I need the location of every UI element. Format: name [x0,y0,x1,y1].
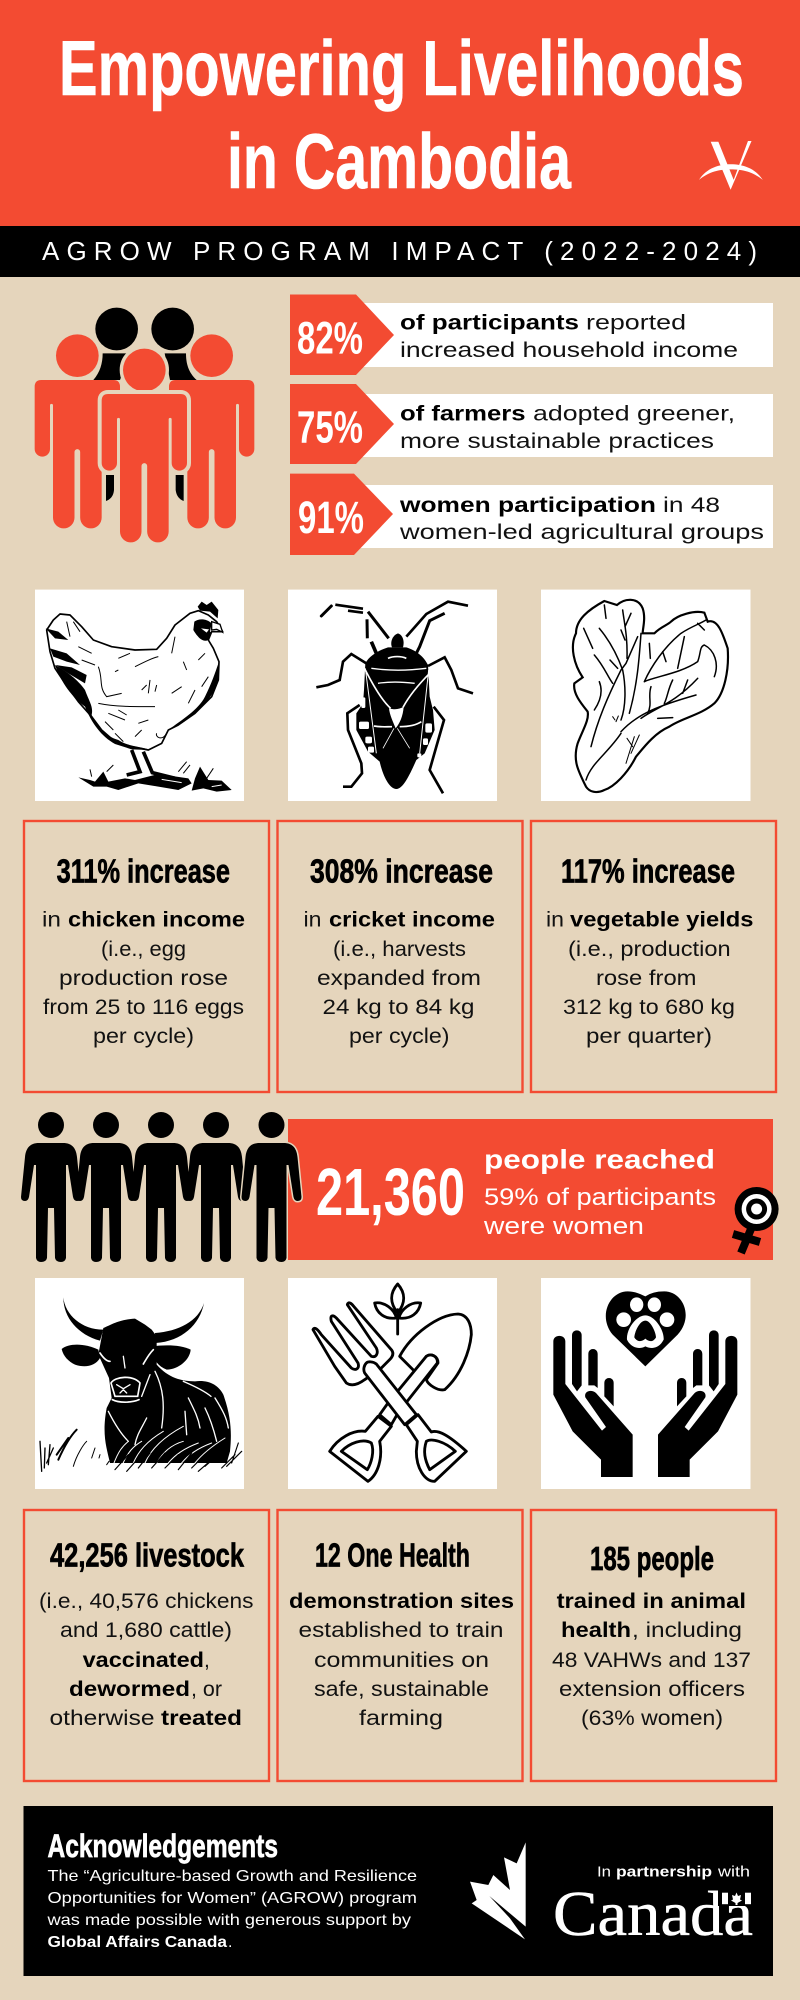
acknowledgement text [46,1868,417,1951]
icon: organisation logo [699,141,763,190]
Canada wordmark: Canada [553,1878,753,1949]
icon: hands holding paw heart [541,1278,750,1489]
stat: 82 percent [290,294,773,375]
icon: row of five people [21,1112,302,1262]
panel: One Health sites: farming [359,1707,443,1730]
heading: Acknowledgements [48,1828,278,1864]
icon: leafy vegetable [541,590,750,801]
panel: One Health sites: safe, sustainable [314,1678,489,1701]
panel: livestock: and 1,680 cattle) [60,1619,232,1642]
panel: chicken income: (i.e., egg [101,938,186,961]
panel: livestock: , [204,1649,210,1672]
stat: 82 percent: of participants [400,312,579,335]
panel: One Health sites: 12 One Health [315,1537,470,1574]
reach text: 59% of participants [484,1184,716,1211]
icon: maple leaf [470,1842,526,1939]
panel: livestock: , or [191,1678,222,1701]
acknowledgement text: Opportunities for Women” (AGROW) program [48,1890,417,1907]
acknowledgement text: Global Affairs Canada [48,1934,227,1951]
icon: group of people [35,308,254,542]
panel: vegetable yields: rose from [596,967,696,990]
panel: vegetable yields: vegetable yields [570,909,754,932]
panel: people trained: 48 VAHWs and 137 [552,1649,751,1672]
icon: female symbol [733,1187,779,1253]
reach text: people reached [484,1144,715,1174]
icon: insect [288,590,497,801]
panel: chicken income: from 25 to 116 eggs [43,996,244,1019]
stat: 75 percent: 75% [297,401,363,452]
panel: One Health sites: communities on [314,1649,489,1672]
panel: livestock: dewormed [69,1678,190,1701]
partnership text: partnership [616,1864,712,1881]
partnership text: In [597,1864,611,1881]
panel: people trained: trained in animal [557,1590,746,1613]
panel: people trained: extension officers [559,1678,745,1701]
stat: 91 percent: in 48 [663,494,720,517]
stat: 75 percent [290,384,773,464]
partnership text: with [717,1864,750,1881]
title: in Cambodia [227,117,571,205]
panel: livestock: treated [161,1707,242,1730]
stat: 91 percent [290,474,773,555]
panel: livestock [24,1510,269,1781]
partnership text [597,1864,750,1881]
panel: cricket income: cricket income [329,909,495,932]
panel: livestock: (i.e., 40,576 chickens [39,1590,254,1613]
acknowledgement text: The “Agriculture-based Growth and Resilience [48,1868,417,1885]
panel: people trained: (63% women) [581,1707,723,1730]
subtitle bar: AGROW PROGRAM IMPACT (2022-2024) [42,236,757,266]
panel: vegetable yields: per quarter) [586,1025,712,1048]
stat: 82 percent: reported [586,312,686,335]
panel: vegetable yields: 312 kg to 680 kg [563,996,735,1019]
panel: chicken income: production rose [59,967,228,990]
panel: cricket income: (i.e., harvests [333,938,466,961]
big number: 21,360 [316,1155,465,1230]
panel: livestock: 42,256 livestock [50,1537,244,1574]
panel: cricket income: per cycle) [349,1025,450,1048]
panel: people trained [531,1510,776,1781]
icon: cow [35,1278,244,1489]
icon: crossed garden tools [288,1278,497,1489]
acknowledgement text: . [228,1934,232,1951]
panel: vegetable yields: in [546,909,564,932]
banner: people reached [288,1119,779,1260]
reach text [483,1144,716,1240]
panel: One Health sites: demonstration sites [289,1590,514,1613]
stat: 75 percent: of farmers [400,403,526,426]
panel: cricket income: in [304,909,322,932]
panel: cricket income [278,821,522,1092]
panel: cricket income: 308% increase [310,853,493,890]
stat: 91 percent: women-led agricultural groups [399,521,764,544]
reach text: were women [483,1213,644,1240]
stat: 82 percent: 82% [297,313,363,364]
panel: livestock: vaccinated [83,1649,204,1672]
title [59,24,744,205]
panel: chicken income: chicken income [68,909,245,932]
header banner [0,0,800,226]
panel: people trained: health [561,1619,631,1642]
stat: 82 percent: increased household income [400,339,738,362]
panel: chicken income [24,821,269,1092]
stat: 91 percent: 91% [298,492,364,543]
panel: vegetable yields: 117% increase [561,853,735,890]
panel: chicken income: 311% increase [57,853,230,890]
panel: vegetable yields: (i.e., production [568,938,731,961]
icon: chicken [35,590,244,801]
stat: 91 percent: women participation [399,494,656,517]
subtitle bar [0,226,800,277]
panel: cricket income: expanded from [317,967,481,990]
panel: people trained: 185 people [590,1540,714,1577]
panel: One Health sites: established to train [298,1619,504,1642]
panel: cricket income: 24 kg to 84 kg [322,996,474,1019]
stat: 75 percent: adopted greener, [533,403,735,426]
acknowledgement text: was made possible with generous support by [46,1912,411,1929]
panel: livestock: otherwise [50,1707,154,1730]
stat: 75 percent: more sustainable practices [400,430,714,453]
panel: chicken income: in [42,909,61,932]
panel: One Health sites [278,1510,522,1781]
panel: people trained: , including [632,1619,742,1642]
panel: vegetable yields [531,821,776,1092]
panel: acknowledgements [24,1806,773,1976]
panel: chicken income: per cycle) [93,1025,194,1048]
